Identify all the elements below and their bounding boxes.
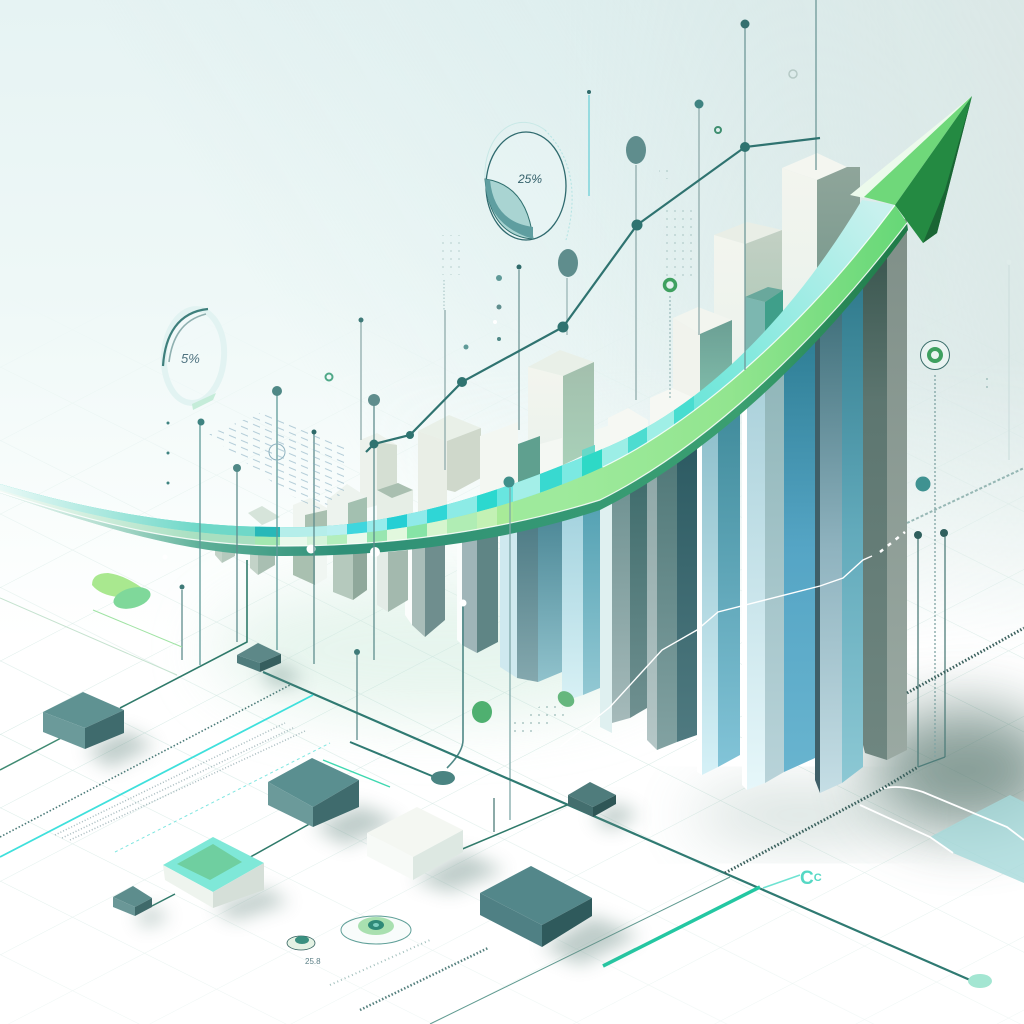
pin xyxy=(272,386,282,650)
band checker blocks: green row xyxy=(17,496,513,546)
band highlight lines xyxy=(0,205,907,546)
floor network lines xyxy=(0,560,970,1024)
arrow band: dark lower strip xyxy=(0,223,908,556)
front row 3D bars xyxy=(215,215,907,793)
connector node xyxy=(431,771,455,785)
box 6 xyxy=(568,782,616,817)
pin xyxy=(940,529,948,757)
bar A xyxy=(782,153,860,360)
thin white trend line on bars xyxy=(560,532,905,747)
bar E xyxy=(528,350,594,490)
box 8: green framed xyxy=(163,837,264,908)
green pill: left xyxy=(92,573,153,613)
dial marker: bottom large xyxy=(341,916,411,944)
cyan C symbol label: C xyxy=(800,868,814,889)
arrow head: darkest edge xyxy=(923,96,972,243)
dotted data textures xyxy=(208,165,991,510)
pin xyxy=(493,798,495,832)
teal bar D xyxy=(745,287,783,370)
pin xyxy=(587,90,591,196)
bar 15 xyxy=(215,541,235,563)
arrow head: light face xyxy=(864,96,972,205)
end node xyxy=(968,974,992,988)
green marker: center xyxy=(472,688,577,738)
bar 7 xyxy=(562,498,600,702)
bar 8 xyxy=(500,510,562,682)
pin xyxy=(504,476,514,820)
pin xyxy=(626,136,646,400)
pin xyxy=(368,394,380,660)
cyan C symbol label: C xyxy=(814,872,822,884)
bar B xyxy=(714,222,782,410)
bar 2 xyxy=(815,280,863,793)
pin xyxy=(669,296,671,400)
bar 4 xyxy=(697,400,740,775)
pin xyxy=(558,249,578,335)
pin xyxy=(198,418,204,665)
band checker blocks: cyan row xyxy=(0,396,694,537)
label: 5% xyxy=(181,351,200,366)
trend line with data points xyxy=(366,138,820,452)
gauge: 25% xyxy=(485,122,572,240)
pin xyxy=(180,584,184,660)
box shadows xyxy=(85,663,640,965)
dashed lines right xyxy=(907,468,1024,693)
label: 25% xyxy=(517,172,542,186)
arrow band: cyan strip xyxy=(0,200,895,537)
pin xyxy=(233,464,241,642)
arrow band: green strip xyxy=(0,205,907,546)
pin xyxy=(694,100,704,335)
pin xyxy=(815,0,817,170)
pin xyxy=(918,757,945,767)
pin xyxy=(447,600,466,768)
white band nodes xyxy=(306,544,380,557)
bar C xyxy=(673,307,732,435)
floor shadow: lower right xyxy=(690,708,1024,837)
pin xyxy=(934,375,936,757)
bar 12 xyxy=(333,552,367,600)
pin xyxy=(914,531,922,767)
pin xyxy=(740,20,750,370)
bar 6 xyxy=(600,475,647,733)
gauge: 5% xyxy=(161,307,227,410)
vertical pins xyxy=(180,0,1012,832)
box 2 xyxy=(237,643,281,672)
bar 5 xyxy=(647,440,697,750)
bar 9 xyxy=(457,530,498,653)
box 3 xyxy=(268,758,359,827)
pin xyxy=(312,430,316,664)
pin xyxy=(354,649,360,740)
pin xyxy=(1006,260,1012,460)
bar 10 xyxy=(405,542,445,637)
teal floor panel with outline xyxy=(860,787,1024,883)
bar 13 xyxy=(293,550,327,585)
bar 1 xyxy=(863,215,907,760)
box 7 xyxy=(113,886,152,916)
bar 3 xyxy=(742,325,815,790)
box 5 xyxy=(480,866,592,947)
band tail fade xyxy=(0,484,188,546)
rising arrow xyxy=(0,96,972,560)
small left bars xyxy=(248,433,413,530)
box 4: white xyxy=(367,807,463,880)
bar 11 xyxy=(377,550,408,612)
arrow head: pale edge xyxy=(850,96,972,198)
pin xyxy=(358,318,364,440)
dial marker: bottom small xyxy=(287,936,321,966)
box 1 xyxy=(43,692,124,749)
pin xyxy=(516,264,522,430)
back row 3D bars xyxy=(248,153,860,530)
small white and teal bars xyxy=(480,388,694,515)
pin xyxy=(444,310,446,470)
label: 25.8 xyxy=(305,957,321,966)
bar F xyxy=(418,415,481,520)
bar 14 xyxy=(250,546,275,575)
small floating dots and rings xyxy=(162,70,950,560)
arrow head: main dark face xyxy=(895,96,972,243)
